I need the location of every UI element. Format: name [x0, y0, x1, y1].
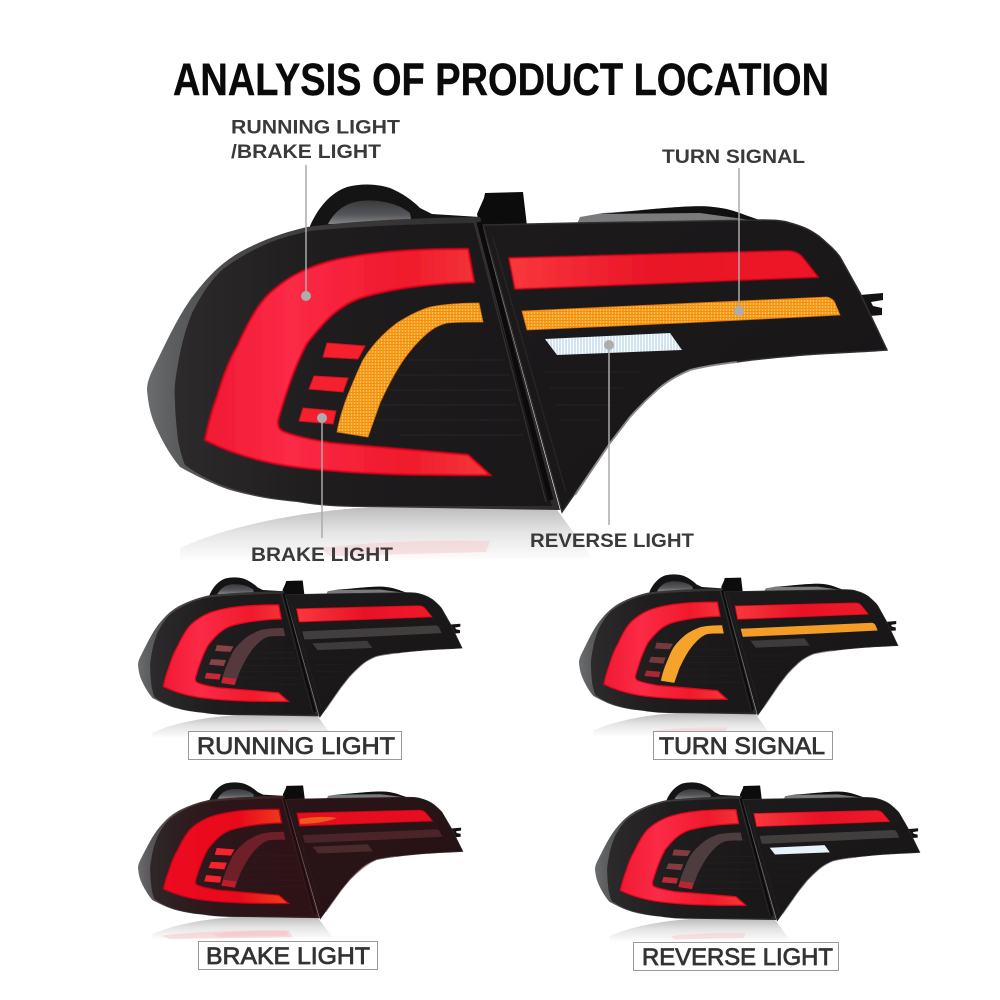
label box: brake light: BRAKE LIGHT	[206, 943, 370, 970]
callout: running light / brake light	[231, 116, 400, 301]
callout: reverse light	[530, 340, 694, 552]
label box: running light: RUNNING LIGHT	[197, 733, 395, 760]
lamp housing	[147, 184, 887, 562]
callout: turn signal	[662, 146, 805, 316]
title: ANALYSIS OF PRODUCT LOCATION	[173, 54, 829, 105]
state image: brake light	[138, 782, 463, 940]
state image: turn signal	[579, 574, 898, 737]
callout: reverse light: REVERSE LIGHT	[530, 530, 694, 552]
label box: turn signal: TURN SIGNAL	[659, 733, 825, 760]
callout: running light / brake light: /BRAKE LIGHT	[231, 141, 381, 163]
three small brake bars	[299, 343, 365, 424]
right lamp amber bar	[522, 297, 840, 330]
main red running and brake light bar	[205, 249, 490, 475]
label box: reverse light: REVERSE LIGHT	[642, 944, 833, 971]
main amber turn signal, left lamp	[337, 303, 483, 437]
callout: brake light	[251, 413, 393, 566]
callout: running light / brake light: RUNNING LIGHT	[231, 116, 400, 138]
state image: running light	[138, 577, 462, 739]
reverse light white bar	[545, 333, 682, 355]
right lamp red bar	[509, 251, 818, 289]
main product: taillights with all lights on	[147, 184, 887, 562]
callout: brake light: BRAKE LIGHT	[251, 544, 393, 566]
callout: turn signal: TURN SIGNAL	[662, 146, 805, 168]
state image: reverse light	[595, 782, 920, 942]
